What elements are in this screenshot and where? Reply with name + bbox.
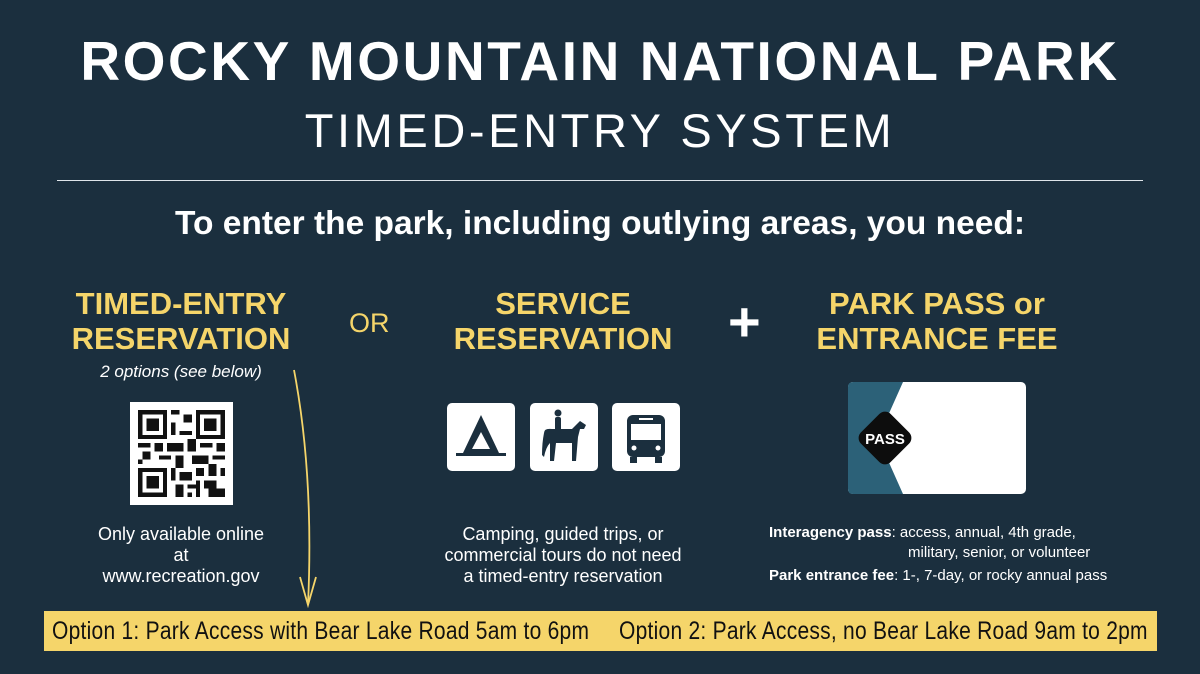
text: online at recreation.gov xyxy=(98,524,264,586)
heading: timed-entry reservation xyxy=(72,286,290,356)
icon: tent xyxy=(447,403,515,471)
heading: park pass: PARK PASS or xyxy=(829,286,1045,321)
icon: horse rider xyxy=(530,403,598,471)
options bar: Option 1: Park Access with Bear Lake Road 5am to 6pm xyxy=(52,617,589,645)
icon: bus xyxy=(612,403,680,471)
heading: park pass xyxy=(816,286,1058,356)
OR label: OR xyxy=(349,308,390,338)
text: service note: a timed-entry reservation xyxy=(463,566,663,586)
text: online at recreation.gov: at xyxy=(173,545,188,565)
note: 2 options: 2 options (see below) xyxy=(100,362,262,381)
heading: timed-entry reservation: RESERVATION xyxy=(72,321,290,356)
heading: park pass: ENTRANCE FEE xyxy=(816,321,1058,356)
icon: QR code xyxy=(130,402,233,505)
options bar xyxy=(44,611,1157,651)
text: pass details: Park entrance fee: 1-, 7-day, or rocky annual pass xyxy=(769,567,1107,584)
icon: pass card: PASS xyxy=(865,431,905,448)
text: service note: commercial tours do not need xyxy=(444,545,682,565)
heading: timed-entry reservation: TIMED-ENTRY xyxy=(76,286,286,321)
options bar: Option 2: Park Access, no Bear Lake Road 9am to 2pm xyxy=(619,617,1148,645)
icons: service xyxy=(447,403,680,471)
text: online at recreation.gov: www.recreation.gov xyxy=(102,566,260,586)
icon: pass card xyxy=(848,382,1026,494)
subheading: To enter the park, including outlying areas, you need: xyxy=(175,205,1025,242)
text: pass details: military, senior, or volunteer xyxy=(908,544,1090,561)
text: service note: Camping, guided trips, or xyxy=(462,524,664,544)
heading: service reservation: RESERVATION xyxy=(454,321,672,356)
text: service note xyxy=(444,524,682,586)
text: pass details: Interagency pass: access, annual, 4th grade, xyxy=(769,524,1076,541)
text: pass details xyxy=(769,524,1107,584)
arrow: to options bar xyxy=(293,370,317,608)
text: online at recreation.gov: Only available online xyxy=(98,524,264,544)
heading: service reservation: SERVICE xyxy=(495,286,631,321)
plus sign: + xyxy=(728,290,761,353)
heading: service reservation xyxy=(454,286,672,356)
title: ROCKY MOUNTAIN NATIONAL PARK xyxy=(80,30,1120,92)
subtitle: TIMED-ENTRY SYSTEM xyxy=(305,104,895,157)
